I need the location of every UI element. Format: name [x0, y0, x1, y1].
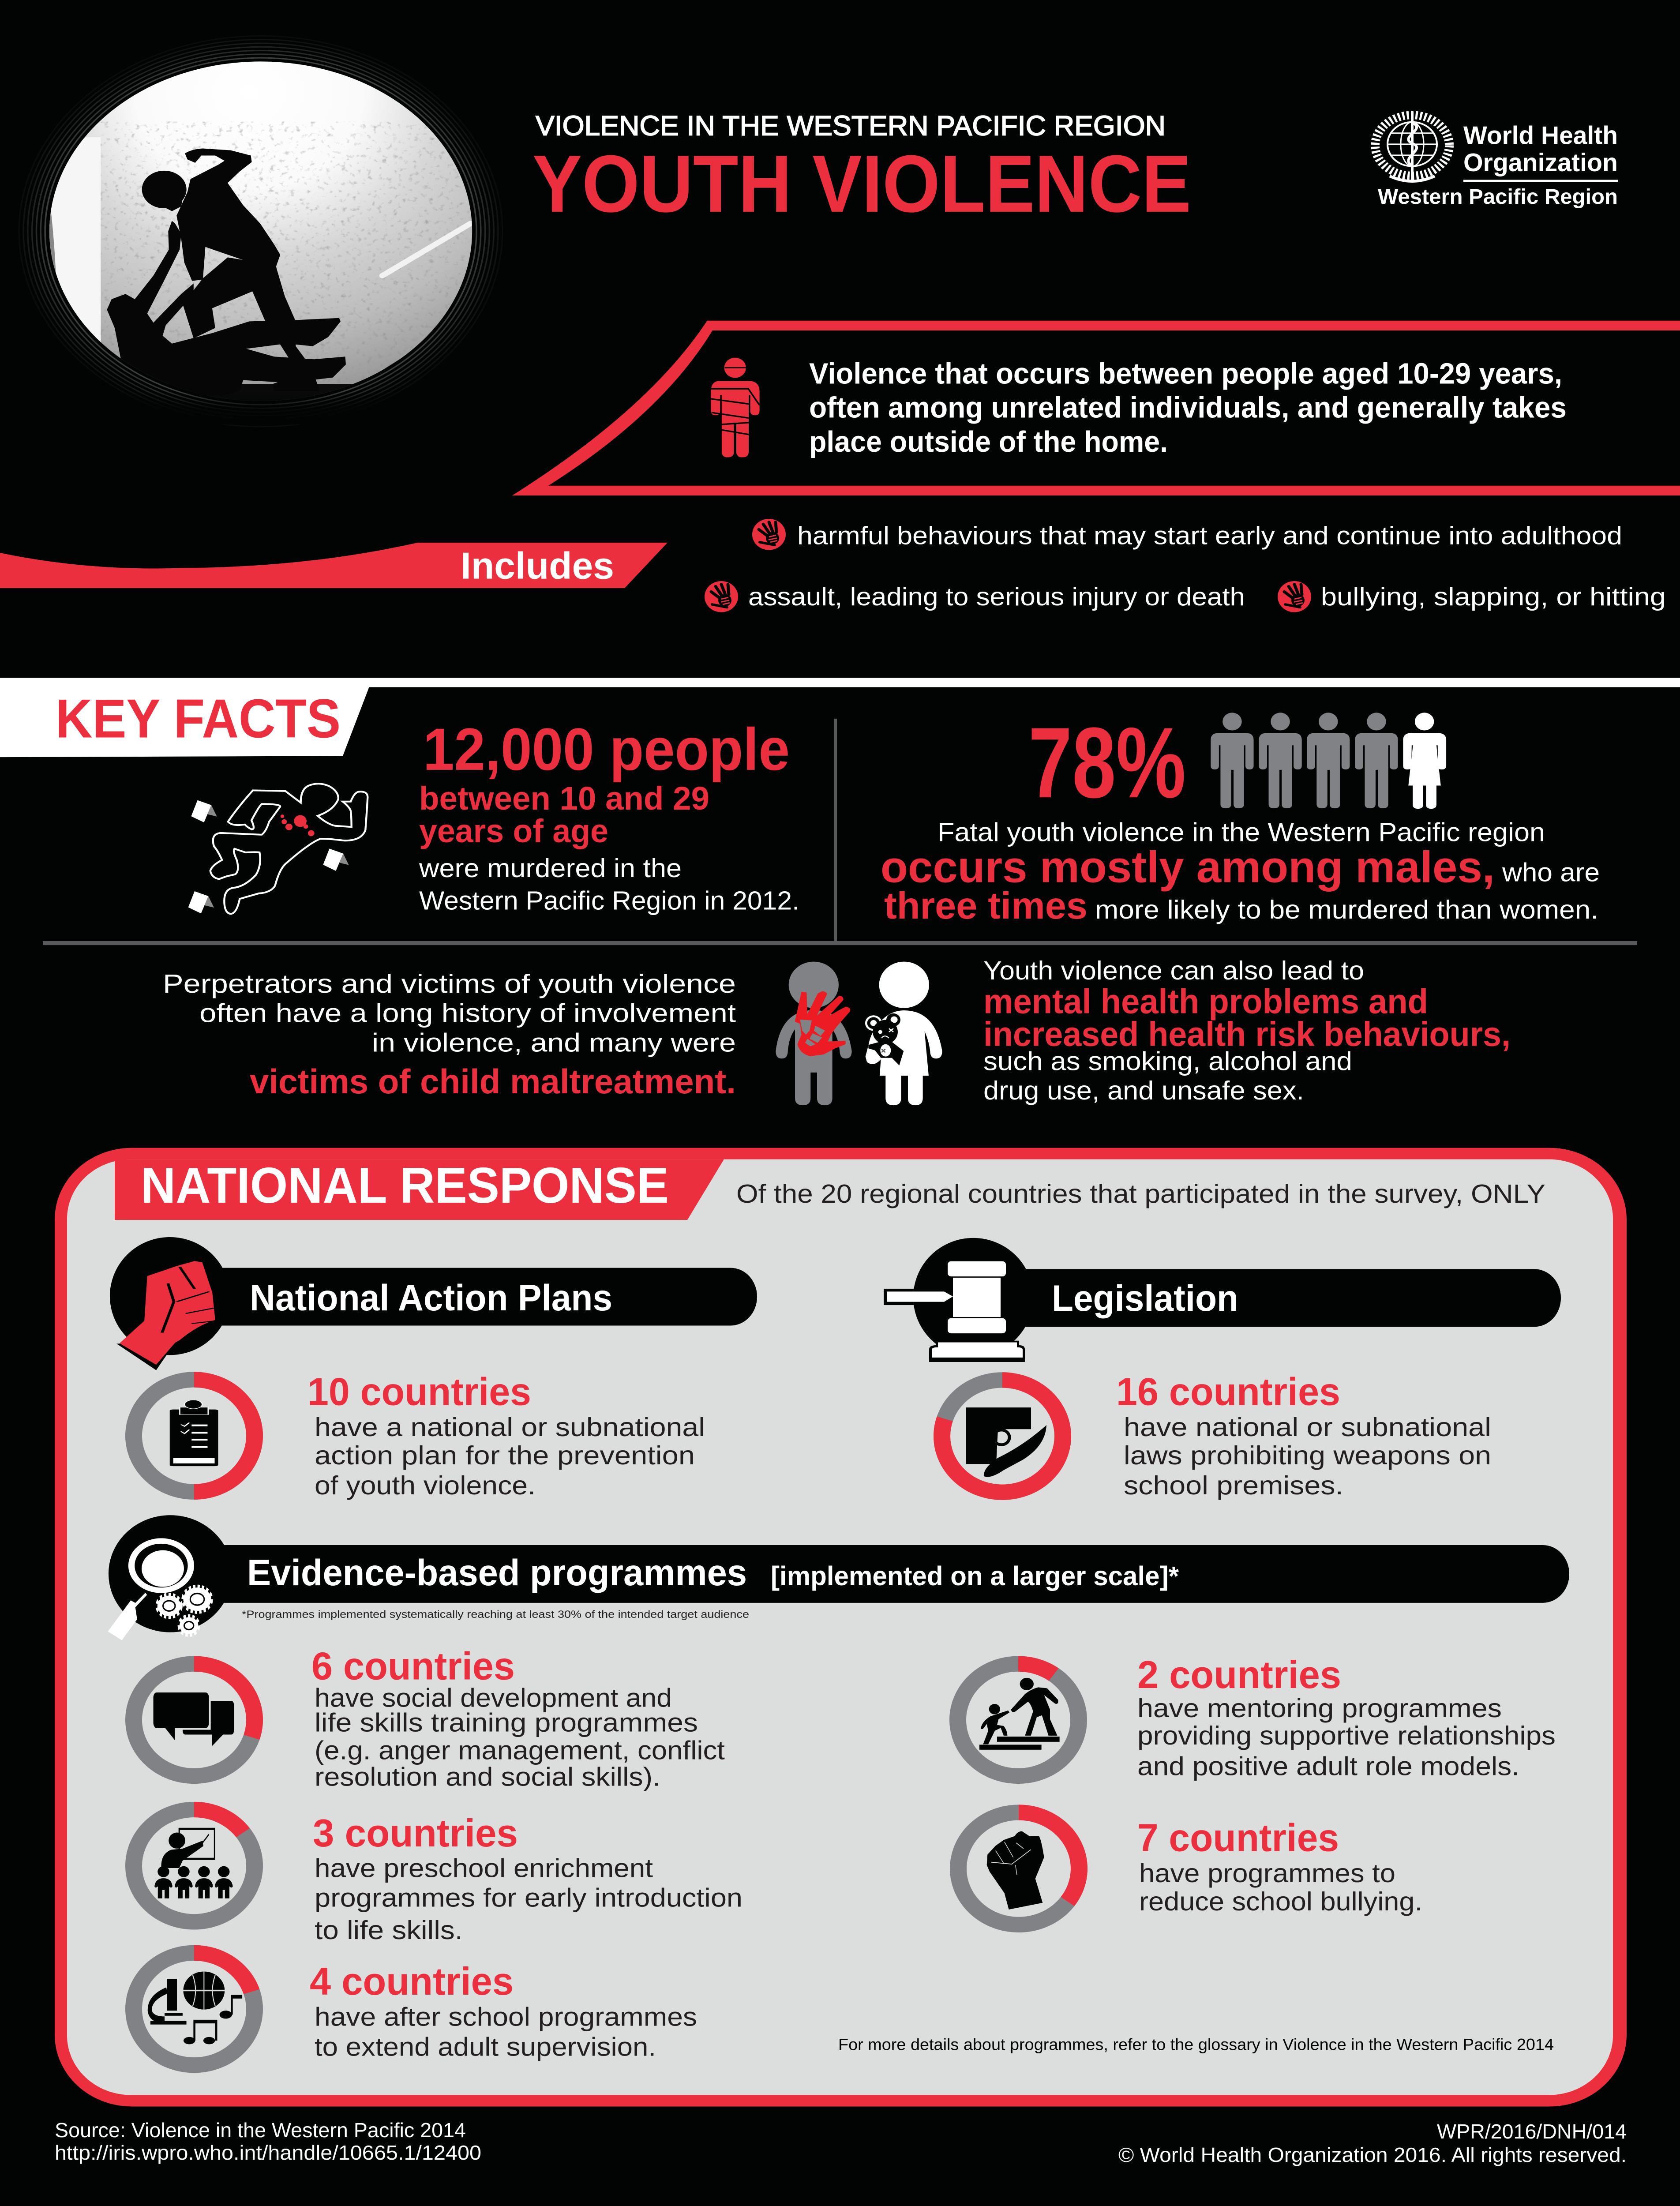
- footer: copyright: © World Health Organization 2016. All rights reserved.: [1118, 2143, 1627, 2166]
- fact: 78%: Fatal youth violence in the Western Pacific region: [938, 818, 1545, 847]
- donut: 3 of 20: [134, 1810, 255, 1922]
- note: glossary reference: For more details about programmes, refer to the glossary in Violence in the Western Pacific 2014: [838, 2036, 1554, 2054]
- stat: 4 countries after school: 4 countries: [310, 1960, 514, 2003]
- heading: key facts: [0, 678, 1680, 757]
- footer: source: [55, 2119, 481, 2165]
- stat: 4 countries after school: to extend adult supervision.: [315, 2032, 656, 2062]
- stat: 10 countries action plan: 10 countries: [308, 1370, 531, 1414]
- list: included behaviours: [705, 519, 1666, 612]
- donut: 4 of 20: [134, 1953, 255, 2065]
- header: evidence-based programmes: [implemented on a larger scale]*: [771, 1561, 1179, 1591]
- icon: microscope, basketball and music: [150, 1971, 242, 2044]
- stat: 3 countries preschool: 3 countries: [313, 1812, 518, 1855]
- header: legislation: Legislation: [1052, 1278, 1238, 1319]
- fact: child maltreatment: often have a long history of involvement: [199, 999, 736, 1028]
- banner: includes: [0, 543, 668, 588]
- stat: 2 countries mentoring: providing supportive relationships: [1137, 1721, 1556, 1750]
- logo: World Health Organization: [1375, 112, 1618, 209]
- icon: two children with red hand and teddy bear: [776, 962, 942, 1105]
- fact: child maltreatment: victims of child maltreatment.: [250, 1063, 736, 1101]
- stat: 4 countries after school: [134, 1953, 697, 2065]
- bullet: harmful behaviours: harmful behaviours that may start early and continue into adulthood: [797, 521, 1622, 550]
- stat: 6 countries life skills: life skills training programmes: [315, 1708, 698, 1737]
- icon: clipboard: [170, 1400, 218, 1466]
- stat: 6 countries life skills: resolution and social skills).: [315, 1763, 660, 1792]
- fact: mental health: mental health problems and: [983, 983, 1428, 1021]
- icon: gavel: [884, 1261, 1025, 1362]
- fact: 12,000 people: between 10 and 29: [419, 780, 709, 817]
- icon: crime scene body outline: [188, 784, 368, 914]
- heading: national response: NATIONAL RESPONSE: [141, 1158, 669, 1214]
- donut: 10 of 20: [134, 1380, 255, 1492]
- footer: source: Source: Violence in the Western Pacific 2014: [55, 2119, 466, 2142]
- icon: red raised fist: [116, 1261, 215, 1370]
- definition text: place outside of the home.: [809, 425, 1168, 458]
- header: legislation: [884, 1238, 1561, 1362]
- fact: mental health: [983, 956, 1511, 1106]
- supertitle: VIOLENCE IN THE WESTERN PACIFIC REGION: [536, 110, 1166, 141]
- fact: 78%: more likely to be murdered than women.: [1095, 895, 1598, 924]
- donut: 7 of 20: [958, 1812, 1079, 1925]
- fact: 12,000 people: were murdered in the: [419, 854, 682, 883]
- white child with dress: [866, 962, 942, 1105]
- fact: 78%: 78%: [1028, 707, 1186, 819]
- main title: YOUTH VIOLENCE: [532, 139, 1191, 229]
- stat: 10 countries action plan: have a national or subnational: [315, 1413, 705, 1442]
- fact: child maltreatment: [163, 969, 736, 1101]
- footer: source: http://iris.wpro.who.int/handle/10665.1/12400: [55, 2142, 481, 2165]
- fact: 12,000 people: 12,000 people: [423, 716, 790, 783]
- footer: copyright: WPR/2016/DNH/014: [1437, 2120, 1627, 2143]
- panel frame: [55, 1148, 1627, 2106]
- stat: 16 countries weapons: have national or subnational: [1124, 1413, 1491, 1442]
- footnote: *Programmes implemented systematically reaching at least 30% of the intended target audience: [242, 1609, 749, 1621]
- stat: 16 countries weapons: [942, 1370, 1491, 1500]
- header: national action plans: National Action Plans: [250, 1277, 612, 1318]
- icon: magnifier and gears: [108, 1538, 211, 1640]
- icon: red bound person: [711, 358, 760, 458]
- stat: 2 countries mentoring: 2 countries: [1137, 1653, 1341, 1696]
- definition text: often among unrelated individuals, and generally takes: [809, 391, 1567, 424]
- stat: 10 countries action plan: action plan for the prevention: [315, 1441, 695, 1471]
- donut: 6 of 20: [134, 1664, 255, 1776]
- icon: four men and one woman: [1211, 713, 1446, 809]
- red bracket frame: [512, 321, 1680, 495]
- footer: copyright: [1118, 2120, 1627, 2166]
- stat: 3 countries preschool: programmes for early introduction: [315, 1883, 742, 1913]
- fact: mental health: such as smoking, alcohol and: [983, 1047, 1352, 1076]
- fact: 12,000 people: Western Pacific Region in 2012.: [419, 886, 799, 915]
- stat: 4 countries after school: have after school programmes: [315, 2003, 697, 2032]
- fact: child maltreatment: Perpetrators and victims of youth violence: [163, 969, 736, 998]
- bullet: assault: assault, leading to serious injury or death: [748, 582, 1245, 611]
- heading: key facts: KEY FACTS: [56, 688, 341, 750]
- icon: teacher and children: [154, 1829, 233, 1898]
- icon: gun and knife: [966, 1407, 1046, 1477]
- organisation name: World Health: [1463, 121, 1618, 150]
- stat: 7 countries bullying: 7 countries: [1137, 1816, 1339, 1860]
- fact: child maltreatment: in violence, and many were: [372, 1028, 736, 1058]
- stat: 2 countries mentoring: and positive adult role models.: [1137, 1752, 1519, 1781]
- header: national action plans: [110, 1237, 757, 1370]
- definition text: [809, 357, 1567, 458]
- fact: 78%: [881, 707, 1600, 927]
- stat: 3 countries preschool: have preschool enrichment: [315, 1854, 653, 1883]
- stat: 16 countries weapons: school premises.: [1124, 1471, 1343, 1500]
- stat: 7 countries bullying: have programmes to: [1139, 1859, 1395, 1888]
- icon: WHO emblem: [1375, 112, 1449, 181]
- logo: World Health Organization: Organization: [1463, 148, 1618, 176]
- regional office: Western Pacific Region: [1378, 185, 1618, 209]
- stat: 10 countries action plan: [134, 1370, 705, 1500]
- panel background: [67, 1159, 1613, 2095]
- stat: 10 countries action plan: of youth violence.: [315, 1471, 536, 1500]
- dividers: [834, 719, 837, 942]
- fact: mental health: drug use, and unsafe sex.: [983, 1076, 1304, 1106]
- stat: 7 countries bullying: reduce school bullying.: [1139, 1887, 1422, 1916]
- stat: 6 countries life skills: 6 countries: [311, 1644, 515, 1688]
- fact: 78%: occurs mostly among males,: [881, 843, 1495, 892]
- donut: 16 of 20: [942, 1380, 1063, 1492]
- header: evidence-based programmes: [108, 1515, 1569, 1640]
- panel: national response: [55, 1148, 1627, 2106]
- photo: tunnel silhouette of youth fight: [19, 36, 502, 427]
- fact: 78%: three times: [884, 885, 1088, 927]
- teddy bear: [866, 1013, 904, 1065]
- fact: 12,000 people: [419, 716, 799, 915]
- fact: mental health: Youth violence can also lead to: [983, 956, 1364, 986]
- survey intro: Of the 20 regional countries that participated in the survey, ONLY: [736, 1179, 1545, 1208]
- icon: black fist: [987, 1831, 1044, 1910]
- fact: 12,000 people: years of age: [419, 813, 608, 850]
- definition text: Violence that occurs between people aged 10-29 years,: [809, 357, 1562, 390]
- stat: 7 countries bullying: [958, 1812, 1422, 1925]
- stat: 2 countries mentoring: have mentoring programmes: [1137, 1694, 1502, 1723]
- header: evidence-based programmes: Evidence-based programmes: [247, 1552, 747, 1593]
- stat: 16 countries weapons: 16 countries: [1116, 1370, 1340, 1414]
- banner: includes: Includes: [461, 545, 614, 587]
- donut: 2 of 20: [958, 1664, 1079, 1776]
- stat: 2 countries mentoring: [958, 1653, 1556, 1781]
- fact: 78%: who are: [1502, 858, 1600, 887]
- stat: 3 countries preschool: [134, 1810, 742, 1945]
- bullet: bullying: bullying, slapping, or hitting: [1321, 582, 1666, 611]
- stat: 3 countries preschool: to life skills.: [315, 1916, 463, 1945]
- icon: adult helping child up steps: [979, 1678, 1060, 1750]
- fact: mental health: increased health risk behaviours,: [983, 1015, 1511, 1054]
- stat: 6 countries life skills: have social development and: [315, 1684, 672, 1713]
- grey child: [776, 962, 852, 1105]
- stat: 16 countries weapons: laws prohibiting weapons on: [1124, 1441, 1491, 1471]
- panel: definition: [512, 321, 1680, 495]
- stat: 6 countries life skills: [134, 1644, 725, 1792]
- title: [532, 110, 1191, 229]
- icon: speech bubbles: [154, 1692, 234, 1746]
- red hand print: [795, 991, 850, 1056]
- stat: 6 countries life skills: (e.g. anger management, conflict: [315, 1736, 725, 1765]
